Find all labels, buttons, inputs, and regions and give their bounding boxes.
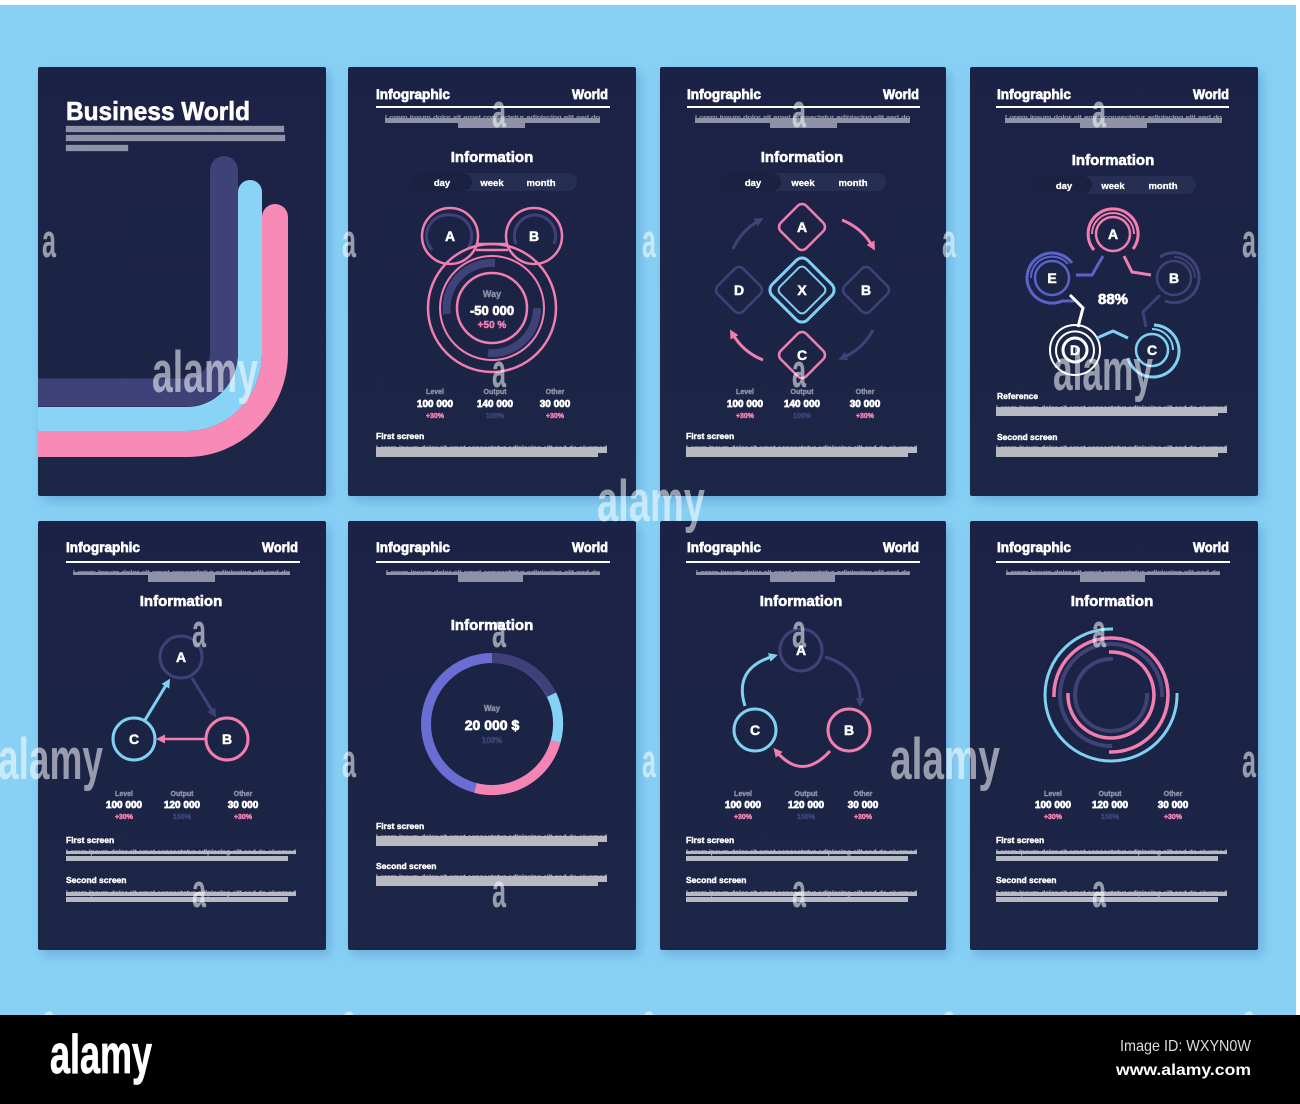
- header: [686, 539, 920, 582]
- stats: 100 000: [725, 800, 762, 811]
- stats: 100%: [486, 413, 505, 420]
- tabs: month: [526, 178, 556, 189]
- header: Infographic: [376, 539, 450, 555]
- heading: Information: [760, 593, 842, 610]
- text block: first: First screen: [66, 835, 114, 845]
- text block: first: Lorem ipsum dolor sit amet consectetur adipiscing elit sed do eiusmod: [66, 849, 296, 856]
- header: Lorem ipsum dolor sit amet consectetur adipiscing elit sed do: [385, 115, 600, 121]
- watermarks: a: [642, 214, 656, 267]
- watermarks: alamy: [152, 340, 258, 405]
- header: [996, 86, 1229, 128]
- tabs: [410, 173, 577, 191]
- stats: 30 000: [1158, 800, 1189, 811]
- text block: first: [66, 835, 296, 861]
- text block: Lorem ipsum dolor sit amet consectetur adipiscing elit sed do eiusmod: [686, 445, 917, 452]
- text block: first: [996, 391, 1227, 416]
- cycle diagram: C: [750, 722, 760, 738]
- header: Infographic: [687, 86, 761, 102]
- stats: [725, 791, 879, 821]
- stats: [106, 791, 259, 821]
- header: World: [883, 86, 919, 102]
- heading: Information: [1072, 152, 1154, 169]
- watermarks: alamy: [1053, 338, 1153, 403]
- watermarks: a: [192, 864, 206, 917]
- pentagon diagram: D: [1070, 342, 1080, 358]
- header: Infographic: [997, 539, 1071, 555]
- stats: Level: [736, 389, 754, 396]
- stats: 30 000: [848, 800, 879, 811]
- watermarks: a: [342, 734, 356, 787]
- text block: second: Lorem ipsum dolor sit amet consectetur adipiscing elit sed do eiusmod: [66, 890, 296, 897]
- stats: 120 000: [1092, 800, 1129, 811]
- text block: First screen: [376, 431, 424, 441]
- text block: first: [686, 835, 917, 861]
- text block: second: Lorem ipsum dolor sit amet consectetur adipiscing elit sed do eiusmod: [996, 445, 1227, 452]
- text block: second: Second screen: [996, 875, 1056, 885]
- stats: 30 000: [228, 800, 259, 811]
- watermarks: a: [792, 344, 806, 397]
- stats: Other: [234, 791, 253, 798]
- cover title: Business World: [66, 96, 250, 126]
- watermarks: a: [42, 214, 56, 267]
- text block: first: First screen: [376, 821, 424, 831]
- text block: first: First screen: [686, 835, 734, 845]
- stats: 140 000: [477, 399, 514, 410]
- header: Lorem ipsum dolor sit amet consectetur adipiscing elit sed do: [695, 115, 910, 121]
- stats: Output: [795, 791, 818, 798]
- header: [996, 539, 1230, 582]
- stats: 140 000: [784, 399, 821, 410]
- cover intro text: Lorem ipsum dolor sit amet consectetur adipiscing elit sed do eiusmod: [66, 126, 284, 132]
- watermarks: a: [1242, 734, 1256, 787]
- header: Infographic: [997, 86, 1071, 102]
- stats: Level: [1044, 791, 1062, 798]
- watermarks: a: [492, 604, 506, 657]
- text block: second: [66, 875, 296, 902]
- diamond diagram: D: [734, 282, 744, 298]
- text block: second: Second screen: [66, 875, 126, 885]
- header: Lorem ipsum dolor sit amet consectetur adipiscing elit sed do: [1005, 115, 1222, 121]
- watermarks: a: [342, 994, 356, 1047]
- tabs: month: [838, 178, 868, 189]
- text block: first: [996, 835, 1227, 861]
- donut: [426, 658, 558, 790]
- watermarks: alamy: [0, 727, 103, 792]
- watermarks: a: [1242, 994, 1256, 1047]
- text block: second: [996, 432, 1227, 457]
- stats: +30%: [546, 413, 565, 420]
- panel: concentric rings: [970, 521, 1258, 950]
- text block: [686, 431, 917, 457]
- cover ribbons: [10, 170, 275, 444]
- stats: 120 000: [164, 800, 201, 811]
- watermarks: a: [792, 604, 806, 657]
- stats: 30 000: [540, 399, 571, 410]
- pentagon diagram: C: [1147, 342, 1157, 358]
- stats: 100 000: [1035, 800, 1072, 811]
- tabs: day: [745, 178, 762, 189]
- text block: [376, 431, 607, 457]
- heading: Information: [451, 617, 533, 634]
- heading: Information: [140, 593, 222, 610]
- stats: Other: [1164, 791, 1183, 798]
- triangle diagram: B: [222, 731, 232, 747]
- heading: Information: [761, 149, 843, 166]
- cycle diagram: B: [844, 722, 854, 738]
- circle chart: [422, 208, 562, 372]
- stats: 100%: [793, 413, 812, 420]
- stats: Other: [854, 791, 873, 798]
- watermarks: a: [1242, 214, 1256, 267]
- tabs: [719, 173, 886, 191]
- cycle diagram: [734, 629, 870, 766]
- text block: second: Lorem ipsum dolor sit amet consectetur adipiscing elit sed do eiusmod: [686, 890, 917, 897]
- panel: triangle flow: [38, 521, 326, 950]
- stats: Level: [734, 791, 752, 798]
- tabs: [1030, 176, 1196, 194]
- header: [687, 86, 920, 128]
- header: [376, 539, 610, 582]
- watermarks: a: [1092, 864, 1106, 917]
- stats: Output: [484, 389, 507, 396]
- watermarks: a: [942, 994, 956, 1047]
- header: Lorem ipsum dolor sit amet consectetur adipiscing elit sed do: [73, 570, 290, 576]
- text block: second: [996, 875, 1227, 902]
- footer bar: [0, 1015, 1300, 1104]
- pentagon diagram: 88%: [1098, 291, 1128, 308]
- stats: 100 000: [106, 800, 143, 811]
- circle chart: Way: [483, 289, 501, 299]
- heading: Information: [451, 149, 533, 166]
- watermarks: a: [492, 84, 506, 137]
- cover ribbon: indigo: [10, 170, 224, 392]
- circle chart: +50 %: [478, 320, 506, 331]
- stats: 100%: [1101, 814, 1120, 821]
- watermarks: a: [42, 994, 56, 1047]
- stats: Output: [171, 791, 194, 798]
- header: Infographic: [376, 86, 450, 102]
- stats: Other: [856, 389, 875, 396]
- watermarks: a: [642, 994, 656, 1047]
- text block: first: Reference: [997, 391, 1038, 401]
- panel: mouse-ear circle chart: [348, 67, 636, 496]
- stats: [417, 389, 571, 420]
- text block: first: Lorem ipsum dolor sit amet consectetur adipiscing elit sed do eiusmod: [686, 849, 917, 856]
- donut: 20 000 $: [465, 717, 519, 733]
- watermarks: a: [192, 604, 206, 657]
- tabs: day: [1056, 181, 1073, 192]
- stats: [727, 389, 881, 420]
- watermarks: a: [792, 864, 806, 917]
- header: Infographic: [687, 539, 761, 555]
- text block: second: Lorem ipsum dolor sit amet consectetur adipiscing elit sed do eiusmod: [376, 874, 607, 881]
- pentagon diagram: [1027, 209, 1199, 377]
- cover intro text: [66, 126, 285, 151]
- text block: Lorem ipsum dolor sit amet consectetur adipiscing elit sed do eiusmod: [376, 445, 607, 452]
- heading: Information: [1071, 593, 1153, 610]
- header: World: [1193, 86, 1229, 102]
- stats: +30%: [426, 413, 445, 420]
- footer logo: alamy: [50, 1023, 152, 1085]
- footer image id: Image ID: WXYN0W: [1120, 1038, 1252, 1055]
- stats: +30%: [736, 413, 755, 420]
- text block: second: [376, 861, 607, 886]
- watermarks: a: [1092, 604, 1106, 657]
- cycle diagram: A: [796, 642, 806, 658]
- panel: three-node cycle: [660, 521, 946, 950]
- header: Infographic: [66, 539, 140, 555]
- watermarks: a: [1092, 84, 1106, 137]
- watermarks: a: [642, 734, 656, 787]
- pentagon diagram: B: [1169, 270, 1179, 286]
- text block: first: Lorem ipsum dolor sit amet consectetur adipiscing elit sed do eiusmod: [996, 849, 1227, 856]
- header: World: [262, 539, 298, 555]
- stats: +30%: [1164, 814, 1183, 821]
- circle chart: B: [529, 228, 539, 244]
- stats: [1035, 791, 1189, 821]
- header: [376, 86, 610, 128]
- donut: Way: [484, 704, 501, 713]
- stats: 100%: [797, 814, 816, 821]
- stats: Output: [1099, 791, 1122, 798]
- diamond diagram: C: [797, 347, 807, 363]
- tabs: week: [1100, 181, 1125, 192]
- panel: donut chart: [348, 521, 636, 950]
- stats: +30%: [1044, 814, 1063, 821]
- header: World: [883, 539, 919, 555]
- watermarks: a: [792, 84, 806, 137]
- header: Lorem ipsum dolor sit amet consectetur adipiscing elit sed do: [1006, 570, 1220, 576]
- watermarks: a: [942, 214, 956, 267]
- header: Lorem ipsum dolor sit amet consectetur adipiscing elit sed do: [696, 570, 910, 576]
- tabs: week: [790, 178, 815, 189]
- panel: cover Business World: [10, 67, 326, 496]
- text block: second: Second screen: [997, 432, 1057, 442]
- watermarks: alamy: [890, 727, 1000, 792]
- tabs: month: [1148, 181, 1178, 192]
- watermarks: a: [492, 344, 506, 397]
- triangle diagram: A: [176, 649, 186, 665]
- cover intro text: veniam quis: [66, 145, 129, 151]
- pentagon diagram: E: [1047, 270, 1057, 286]
- footer url: www.alamy.com: [1115, 1062, 1251, 1079]
- header: World: [572, 86, 608, 102]
- text block: first: First screen: [996, 835, 1044, 845]
- text block: First screen: [686, 431, 734, 441]
- tabs: day: [434, 178, 451, 189]
- stats: +30%: [734, 814, 753, 821]
- cover intro text: tempor incididunt ut labore et dolore magna aliqua ut enim ad minim: [66, 135, 285, 141]
- header: [66, 539, 300, 582]
- text block: first: Lorem ipsum dolor sit amet consectetur adipiscing elit sed do eiusmod: [996, 405, 1227, 412]
- stats: Output: [791, 389, 814, 396]
- pentagon diagram: A: [1108, 226, 1118, 242]
- watermarks: a: [492, 864, 506, 917]
- text block: first: [376, 821, 607, 846]
- circle chart: -50 000: [470, 303, 514, 318]
- triangle diagram: C: [129, 731, 139, 747]
- diamond diagram: A: [797, 219, 807, 235]
- cover ribbon: pink: [10, 217, 275, 444]
- header: Lorem ipsum dolor sit amet consectetur adipiscing elit sed do: [386, 570, 600, 576]
- stats: +30%: [234, 814, 253, 821]
- stats: +30%: [115, 814, 134, 821]
- stats: Level: [426, 389, 444, 396]
- watermarks: alamy: [597, 469, 705, 534]
- text block: second: Lorem ipsum dolor sit amet consectetur adipiscing elit sed do eiusmod: [996, 890, 1227, 897]
- cover ribbon: cyan: [10, 192, 250, 419]
- text block: second: Second screen: [376, 861, 436, 871]
- stats: +30%: [854, 814, 873, 821]
- triangle diagram: [113, 636, 248, 760]
- text block: second: [686, 875, 917, 902]
- watermarks: a: [342, 214, 356, 267]
- stats: 120 000: [788, 800, 825, 811]
- stats: Level: [115, 791, 133, 798]
- stats: 100 000: [417, 399, 454, 410]
- header: World: [1193, 539, 1229, 555]
- text block: second: Second screen: [686, 875, 746, 885]
- donut: 100%: [482, 736, 502, 745]
- stats: 30 000: [850, 399, 881, 410]
- text block: first: Lorem ipsum dolor sit amet consectetur adipiscing elit sed do eiusmod: [376, 834, 607, 841]
- stats: 100 000: [727, 399, 764, 410]
- stats: Other: [546, 389, 565, 396]
- stats: +30%: [856, 413, 875, 420]
- diamond diagram: [714, 202, 891, 380]
- stats: 100%: [173, 814, 192, 821]
- rings chart: [1045, 629, 1177, 761]
- diamond diagram: X: [797, 282, 807, 298]
- panel: diamond cycle: [660, 67, 946, 496]
- header: World: [572, 539, 608, 555]
- tabs: week: [479, 178, 504, 189]
- circle chart: A: [445, 228, 455, 244]
- diamond diagram: B: [861, 282, 871, 298]
- panel: five-node pentagon: [970, 67, 1258, 496]
